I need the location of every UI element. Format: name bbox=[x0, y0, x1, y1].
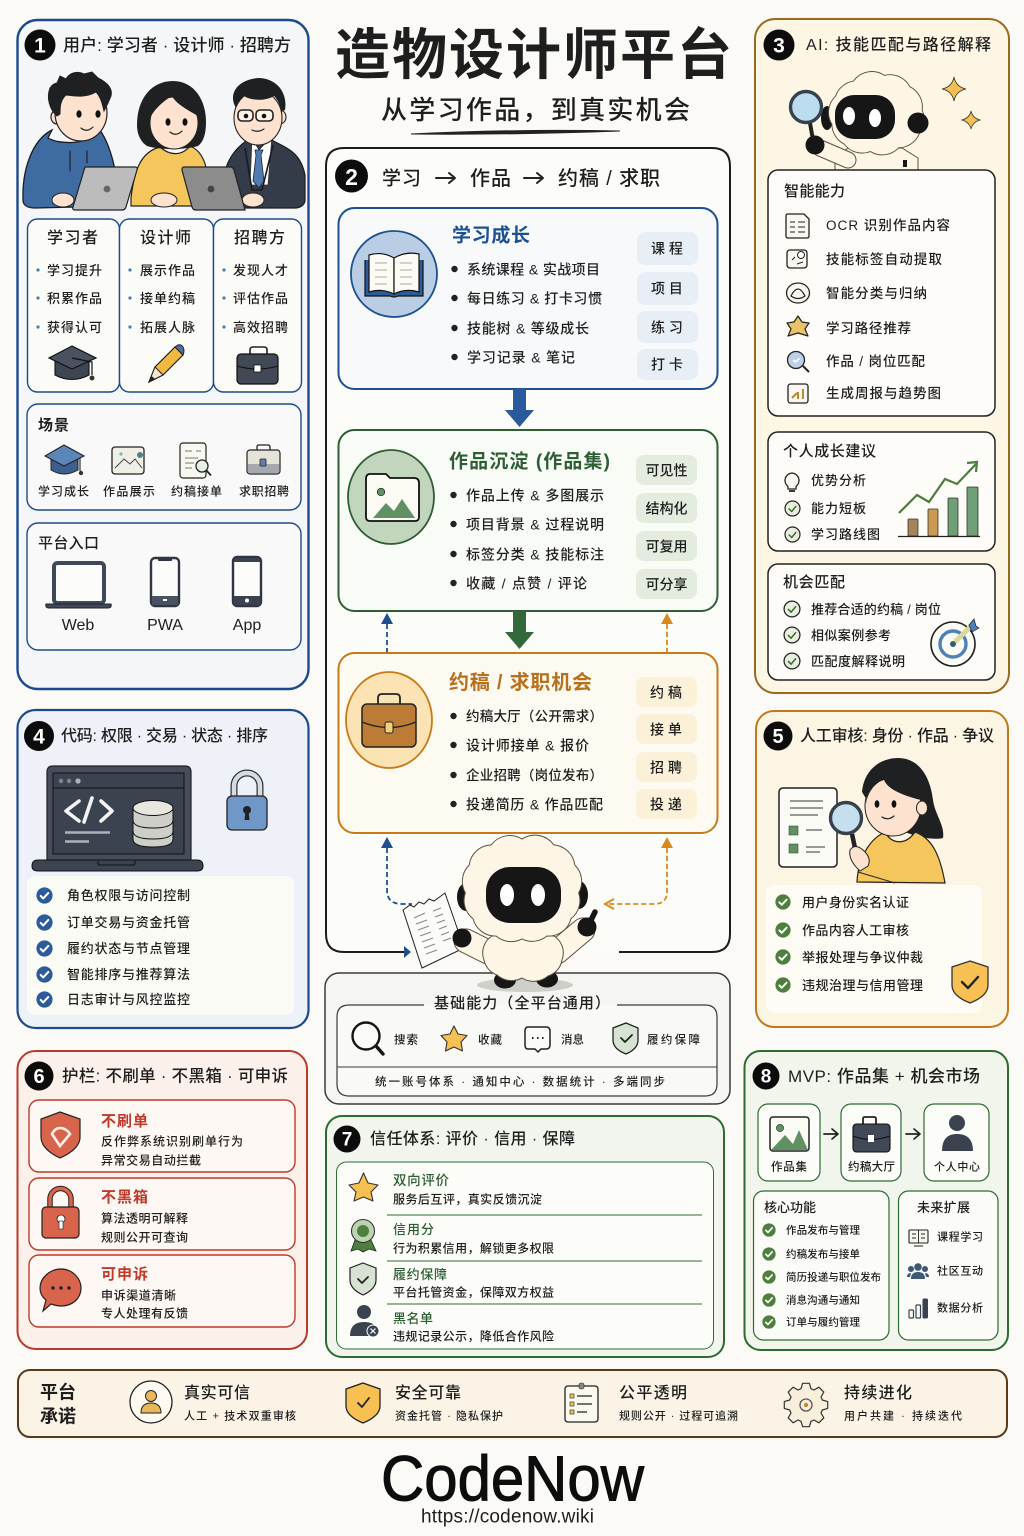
checklist: 日志审计与风控监控 bbox=[67, 992, 190, 1007]
inner card: trust items: 行为积累信用，解锁更多权限 bbox=[393, 1240, 554, 1255]
mascot with magnifier bbox=[790, 72, 928, 170]
icon: chat bbox=[525, 1027, 550, 1052]
card: scenes bbox=[27, 404, 301, 510]
stage: learning growth: 学习成长 bbox=[452, 223, 530, 246]
card: opportunity match: 推荐合适的约稿 / 岗位 bbox=[811, 602, 941, 617]
promise: evolving: 持续进化 bbox=[844, 1384, 912, 1402]
stage: opportunities: 设计师接单 & 报价 bbox=[466, 738, 589, 754]
illustration: laptop with code and database bbox=[32, 766, 203, 871]
card: smart capabilities bbox=[768, 170, 995, 416]
card: no black box bbox=[29, 1178, 295, 1250]
card: smart capabilities: 作品 / 岗位匹配 bbox=[826, 353, 926, 369]
panel 8: MVP bbox=[744, 1051, 1008, 1350]
step: bidding hall: 约稿大厅 bbox=[848, 1159, 895, 1173]
card: designer: 设计师 bbox=[140, 229, 191, 247]
icon: person badge bbox=[130, 1381, 172, 1423]
panel: base capabilities: 消息 bbox=[561, 1032, 584, 1046]
icon: check bbox=[785, 501, 800, 516]
icon: community bbox=[907, 1263, 929, 1279]
card: core features: 订单与履约管理 bbox=[786, 1315, 860, 1328]
checklist: 违规治理与信用管理 bbox=[802, 978, 923, 993]
icon: match magnifier bbox=[788, 352, 809, 372]
stage: learning growth bbox=[338, 208, 718, 389]
card: scenes: 约稿接单 bbox=[171, 483, 222, 498]
icon: briefcase bbox=[237, 347, 278, 384]
arrow: learning to portfolio bbox=[505, 389, 534, 427]
checklist: 角色权限与访问控制 bbox=[67, 888, 190, 903]
icon: document bbox=[786, 214, 809, 238]
card: can appeal: 专人处理有反馈 bbox=[101, 1305, 188, 1320]
icon: gold shield bbox=[346, 1383, 380, 1423]
card: scenes: 作品展示 bbox=[103, 484, 155, 498]
card: designer: 拓展人脉 bbox=[140, 320, 195, 335]
dashed arrow: sheep to opportunity (blue) bbox=[381, 837, 412, 904]
card: no fake orders bbox=[29, 1100, 295, 1172]
card: scenes: 学习成长 bbox=[38, 483, 89, 498]
panel 5: human review bbox=[756, 711, 1008, 1027]
woman bbox=[131, 146, 207, 206]
panel 7: trust system bbox=[326, 1116, 724, 1357]
icon: report chart bbox=[788, 384, 808, 403]
step: portfolio bbox=[758, 1104, 820, 1181]
tags bbox=[636, 677, 697, 819]
promise: transparent: 公平透明 bbox=[619, 1384, 687, 1402]
inner card: trust items: 服务后互评，真实反馈沉淀 bbox=[393, 1191, 542, 1206]
promise: safe: 安全可靠 bbox=[395, 1383, 461, 1402]
icon: medal bbox=[351, 1220, 376, 1252]
checklist bbox=[766, 885, 982, 1013]
main title: 造物设计师平台 bbox=[335, 24, 732, 86]
badge 7: 7 bbox=[342, 1130, 352, 1150]
checklist: 用户身份实名认证 bbox=[802, 895, 909, 910]
icon: classify ring bbox=[786, 283, 810, 303]
arrow bbox=[906, 1129, 920, 1139]
card: opportunity match: 相似案例参考 bbox=[811, 628, 891, 643]
hands bbox=[52, 193, 74, 207]
panel 8 heading: MVP: 作品集 + 机会市场 bbox=[788, 1067, 980, 1086]
card: smart capabilities: 生成周报与趋势图 bbox=[826, 386, 941, 401]
panel 3: AI bbox=[755, 19, 1009, 693]
dashed arrow: opportunity up to portfolio (blue) bbox=[381, 613, 393, 653]
man bbox=[224, 138, 305, 208]
card: platform entries: Web bbox=[62, 617, 94, 634]
icon: lock bbox=[227, 773, 267, 830]
tags: 打 卡 bbox=[651, 357, 683, 373]
card: no black box: 不黑箱 bbox=[101, 1188, 148, 1206]
sparkle small bbox=[962, 111, 980, 129]
card: platform entries bbox=[27, 523, 301, 650]
stage: portfolio: 作品上传 & 多图展示 bbox=[466, 488, 604, 504]
icon: document search bbox=[180, 443, 211, 478]
panel 7 heading: 信任体系: 评价 · 信用 · 保障 bbox=[370, 1130, 575, 1148]
promise: authentic: 真实可信 bbox=[184, 1383, 250, 1402]
promise strip bbox=[18, 1370, 1007, 1437]
card: opportunity match: 匹配度解释说明 bbox=[811, 654, 905, 669]
checklist: 作品内容人工审核 bbox=[802, 923, 909, 938]
card: no fake orders: 反作弊系统识别刷单行为 bbox=[101, 1133, 243, 1148]
icon: check bbox=[784, 627, 800, 643]
icon: course screen bbox=[909, 1230, 928, 1246]
badge 5: 5 bbox=[772, 726, 784, 748]
icon: target bbox=[931, 619, 979, 666]
illustration: three users with laptops bbox=[23, 72, 305, 210]
badge 2: 2 bbox=[345, 164, 358, 190]
card: recruiter: 招聘方 bbox=[234, 228, 285, 247]
card: growth advice: 学习路线图 bbox=[811, 527, 880, 542]
card: designer: 展示作品 bbox=[140, 263, 195, 278]
icon: check bbox=[784, 653, 800, 669]
card: can appeal bbox=[29, 1255, 295, 1327]
badge 1 bbox=[24, 30, 56, 60]
strip heading bbox=[40, 1382, 76, 1427]
promise: safe: 资金托管 · 隐私保护 bbox=[395, 1408, 503, 1422]
card: future expansion bbox=[898, 1191, 998, 1340]
promise: authentic: 人工 + 技术双重审核 bbox=[184, 1408, 296, 1422]
card: smart capabilities: 技能标签自动提取 bbox=[826, 251, 942, 267]
card: smart capabilities: 学习路径推荐 bbox=[826, 320, 911, 336]
badge 6: 6 bbox=[33, 1066, 45, 1088]
card: recruiter: 高效招聘 bbox=[233, 320, 288, 335]
icon: star path bbox=[787, 316, 809, 336]
card: no black box: 规则公开可查询 bbox=[101, 1230, 188, 1244]
strip heading: 平台 bbox=[40, 1382, 76, 1403]
panel 5 heading: 人工审核: 身份 · 作品 · 争议 bbox=[800, 726, 994, 745]
website URL: https://codenow.wiki bbox=[421, 1506, 594, 1527]
icon: red lock bbox=[42, 1188, 79, 1238]
card: no black box: 算法透明可解释 bbox=[101, 1210, 188, 1225]
card: can appeal: 申诉渠道清晰 bbox=[101, 1287, 176, 1302]
card: recruiter bbox=[214, 219, 302, 392]
card: platform entries: 平台入口 bbox=[38, 534, 99, 552]
card: scenes: 场景 bbox=[38, 417, 69, 434]
panel: base capabilities bbox=[325, 973, 730, 1104]
tags: 投 递 bbox=[650, 797, 682, 813]
panel: base capabilities: 履约保障 bbox=[647, 1032, 700, 1046]
promise: evolving: 用户共建 · 持续迭代 bbox=[844, 1408, 962, 1422]
panel 2: learning to opportunity flow bbox=[326, 148, 730, 958]
badge 6 bbox=[24, 1062, 54, 1090]
icon: PWA phone bbox=[151, 558, 179, 606]
card: recruiter: 评估作品 bbox=[233, 291, 288, 306]
card: designer bbox=[120, 219, 214, 392]
card: platform entries: PWA bbox=[147, 617, 183, 634]
card: no fake orders: 不刷单 bbox=[101, 1113, 148, 1130]
tags: 接 单 bbox=[650, 722, 682, 738]
card: future expansion: 数据分析 bbox=[937, 1300, 983, 1314]
stage: portfolio: 收藏 / 点赞 / 评论 bbox=[466, 576, 587, 592]
card: core features: 简历投递与职位发布 bbox=[786, 1270, 881, 1283]
promise: evolving bbox=[784, 1383, 962, 1427]
tags: 可复用 bbox=[646, 539, 688, 555]
icon: star bbox=[349, 1173, 378, 1201]
checklist: 订单交易与资金托管 bbox=[67, 915, 190, 930]
panel: base capabilities: 收藏 bbox=[478, 1032, 502, 1046]
icon: star bbox=[441, 1026, 467, 1051]
card: opportunity match bbox=[768, 564, 995, 680]
card: growth advice: 能力短板 bbox=[811, 501, 866, 516]
card: future expansion: 未来扩展 bbox=[917, 1200, 970, 1215]
card: learner: 积累作品 bbox=[47, 291, 102, 306]
inner card: trust items: 黑名单 bbox=[393, 1311, 433, 1326]
step: portfolio: 作品集 bbox=[771, 1159, 808, 1173]
badge 8: 8 bbox=[761, 1066, 771, 1088]
icon: gold shield bbox=[952, 961, 988, 1003]
panel 6: guardrails bbox=[18, 1051, 307, 1349]
card: can appeal: 可申诉 bbox=[101, 1266, 148, 1283]
panel 1 heading: 用户: 学习者 · 设计师 · 招聘方 bbox=[63, 35, 291, 55]
card: core features: 核心功能 bbox=[764, 1200, 816, 1215]
badge 5 bbox=[764, 722, 792, 750]
tags: 约 稿 bbox=[650, 685, 682, 701]
icon: open book bbox=[351, 231, 437, 317]
panel 6 heading: 护栏: 不刷单 · 不黑箱 · 可申诉 bbox=[62, 1067, 288, 1086]
icon: App phone bbox=[233, 557, 261, 606]
card: growth advice: 个人成长建议 bbox=[783, 442, 876, 460]
icon: gear bbox=[784, 1383, 828, 1427]
subtitle: 从学习作品，到真实机会 bbox=[381, 95, 690, 125]
icon: light bulb bbox=[785, 473, 799, 491]
card: core features: 消息沟通与通知 bbox=[786, 1293, 860, 1306]
promise: transparent: 规则公开 · 过程可追溯 bbox=[619, 1408, 738, 1422]
panel 3 heading: AI: 技能匹配与路径解释 bbox=[806, 36, 991, 54]
badge 7 bbox=[334, 1126, 360, 1152]
arrow bbox=[824, 1129, 838, 1139]
user role cards bbox=[28, 219, 302, 392]
card: learner bbox=[28, 219, 120, 392]
stage: opportunities: 约稿 / 求职机会 bbox=[449, 670, 592, 694]
icon: gray briefcase bbox=[247, 445, 280, 474]
panel 4: code bbox=[18, 710, 308, 1028]
icon: red shield bbox=[41, 1112, 80, 1158]
card: growth advice bbox=[768, 432, 995, 551]
stage: learning growth: 系统课程 & 实战项目 bbox=[467, 262, 600, 278]
sparkle large bbox=[942, 77, 966, 101]
stage: learning growth: 每日练习 & 打卡习惯 bbox=[467, 291, 602, 307]
tags: 可见性 bbox=[646, 463, 688, 479]
icon: brown briefcase bbox=[346, 672, 432, 768]
icon: laptop bbox=[46, 563, 111, 608]
laptops bbox=[73, 167, 137, 210]
promise: authentic bbox=[130, 1381, 296, 1423]
card: future expansion: 社区互动 bbox=[937, 1263, 983, 1277]
stage: opportunities: 投递简历 & 作品匹配 bbox=[466, 797, 603, 813]
icon: pencil bbox=[149, 345, 184, 382]
badge 3: 3 bbox=[773, 34, 785, 58]
stage: learning growth: 技能树 & 等级成长 bbox=[467, 321, 589, 337]
checklist bbox=[27, 876, 294, 1015]
stage: portfolio: 标签分类 & 技能标注 bbox=[466, 547, 604, 563]
stage: opportunities: 企业招聘（岗位发布） bbox=[466, 767, 603, 783]
arrow tip at frame bottom bbox=[404, 946, 411, 958]
inner card: trust items: 双向评价 bbox=[393, 1173, 450, 1188]
boy bbox=[23, 130, 118, 208]
inner card: trust items bbox=[336, 1162, 714, 1349]
card: smart capabilities: OCR 识别作品内容 bbox=[826, 217, 950, 233]
card: smart capabilities: 智能能力 bbox=[784, 182, 845, 200]
dashed arrow: opportunity up to portfolio (orange) bbox=[661, 613, 673, 653]
stage: portfolio: 作品沉淀 (作品集) bbox=[449, 450, 610, 472]
card: no fake orders: 异常交易自动拦截 bbox=[101, 1152, 201, 1167]
tags: 结构化 bbox=[646, 501, 688, 517]
mascot: fluffy sheep with paper bbox=[403, 835, 596, 992]
card: core features: 约稿发布与接单 bbox=[786, 1247, 860, 1260]
card: growth advice: 优势分析 bbox=[811, 473, 866, 488]
badge 8 bbox=[752, 1062, 780, 1090]
checklist: 履约状态与节点管理 bbox=[67, 941, 190, 956]
step: bidding hall bbox=[841, 1104, 901, 1181]
icon: clipboard bbox=[565, 1383, 598, 1422]
card: learner: 获得认可 bbox=[47, 320, 102, 335]
inner card: trust items: 信用分 bbox=[393, 1222, 434, 1237]
stage: portfolio: 项目背景 & 过程说明 bbox=[466, 517, 604, 533]
card: learner: 学习提升 bbox=[47, 263, 102, 278]
card: core features: 作品发布与管理 bbox=[786, 1223, 860, 1236]
CodeNow logo: CodeNow bbox=[381, 1443, 645, 1515]
icon: shield bbox=[350, 1263, 376, 1295]
card: future expansion: 课程学习 bbox=[937, 1229, 983, 1243]
card: smart capabilities: 智能分类与归纳 bbox=[826, 285, 927, 301]
promise: transparent bbox=[565, 1383, 738, 1422]
card: learner: 学习者 bbox=[47, 228, 98, 247]
panel 2 heading: 约稿 / 求职 bbox=[558, 167, 660, 190]
bottom line: 统一账号体系 · 通知中心 · 数据统计 · 多端同步 bbox=[375, 1074, 665, 1088]
checklist: 智能排序与推荐算法 bbox=[67, 967, 190, 982]
tags bbox=[637, 232, 698, 380]
title underline bbox=[411, 130, 620, 134]
paper bbox=[403, 893, 464, 968]
card: opportunity match: 机会匹配 bbox=[783, 574, 845, 591]
growth bar chart bbox=[898, 462, 980, 536]
icon: cap bbox=[45, 445, 84, 475]
panel: base capabilities: 搜索 bbox=[394, 1032, 418, 1046]
tags: 可分享 bbox=[646, 577, 688, 593]
inner card: trust items: 违规记录公示，降低合作风险 bbox=[393, 1328, 554, 1343]
panel 1: users bbox=[18, 20, 308, 689]
badge 2 bbox=[335, 160, 368, 192]
panel 2 heading bbox=[382, 167, 660, 190]
card: scenes: 求职招聘 bbox=[239, 483, 289, 498]
panel 4 heading: 代码: 权限 · 交易 · 状态 · 排序 bbox=[61, 726, 268, 745]
badge 4: 4 bbox=[33, 726, 45, 748]
tags: 练 习 bbox=[651, 320, 683, 336]
stage: opportunities bbox=[338, 653, 718, 833]
card: designer: 接单约稿 bbox=[140, 291, 195, 306]
tags bbox=[636, 455, 697, 599]
badge 3 bbox=[764, 30, 794, 60]
icon: blacklist person bbox=[350, 1305, 379, 1337]
tags: 项 目 bbox=[651, 281, 683, 297]
stage: learning growth: 学习记录 & 笔记 bbox=[467, 350, 575, 366]
tags: 招 聘 bbox=[650, 760, 682, 776]
card: recruiter: 发现人才 bbox=[233, 263, 288, 278]
card: platform entries: App bbox=[233, 617, 261, 634]
icon: check bbox=[784, 601, 800, 617]
strip heading: 承诺 bbox=[40, 1407, 76, 1427]
icon: graduation cap bbox=[49, 346, 96, 380]
promise: safe bbox=[346, 1383, 503, 1423]
illustration: reviewer with document bbox=[779, 758, 945, 883]
heading: 基础能力（全平台通用） bbox=[434, 994, 610, 1012]
card: core features bbox=[754, 1191, 889, 1340]
icon: folder image bbox=[348, 450, 434, 544]
arrow: portfolio to opportunity bbox=[505, 611, 534, 649]
checklist: 举报处理与争议仲裁 bbox=[802, 950, 923, 965]
panel 2 heading: 作品 bbox=[470, 167, 511, 190]
icon: shield bbox=[613, 1023, 638, 1054]
stage: opportunities: 约稿大厅（公开需求） bbox=[466, 709, 603, 724]
inner card: trust items: 平台托管资金，保障双方权益 bbox=[393, 1284, 554, 1299]
badge 1: 1 bbox=[34, 34, 46, 58]
tags: 课 程 bbox=[651, 241, 683, 257]
panel 2 heading: 学习 bbox=[382, 167, 421, 189]
icon: check bbox=[785, 527, 800, 542]
stage: portfolio bbox=[338, 430, 718, 611]
badge 4 bbox=[24, 721, 54, 751]
icon: tag bbox=[787, 250, 807, 268]
dashed arrow: opportunity to sheep (orange) bbox=[605, 837, 673, 909]
icon: search bbox=[352, 1022, 383, 1054]
icon: image bbox=[112, 447, 144, 474]
icon: red speech bubble bbox=[40, 1269, 81, 1311]
icon: data bars bbox=[909, 1299, 928, 1318]
step: personal center: 个人中心 bbox=[934, 1159, 980, 1173]
step: personal center bbox=[924, 1104, 989, 1181]
inner card: trust items: 履约保障 bbox=[393, 1267, 447, 1282]
